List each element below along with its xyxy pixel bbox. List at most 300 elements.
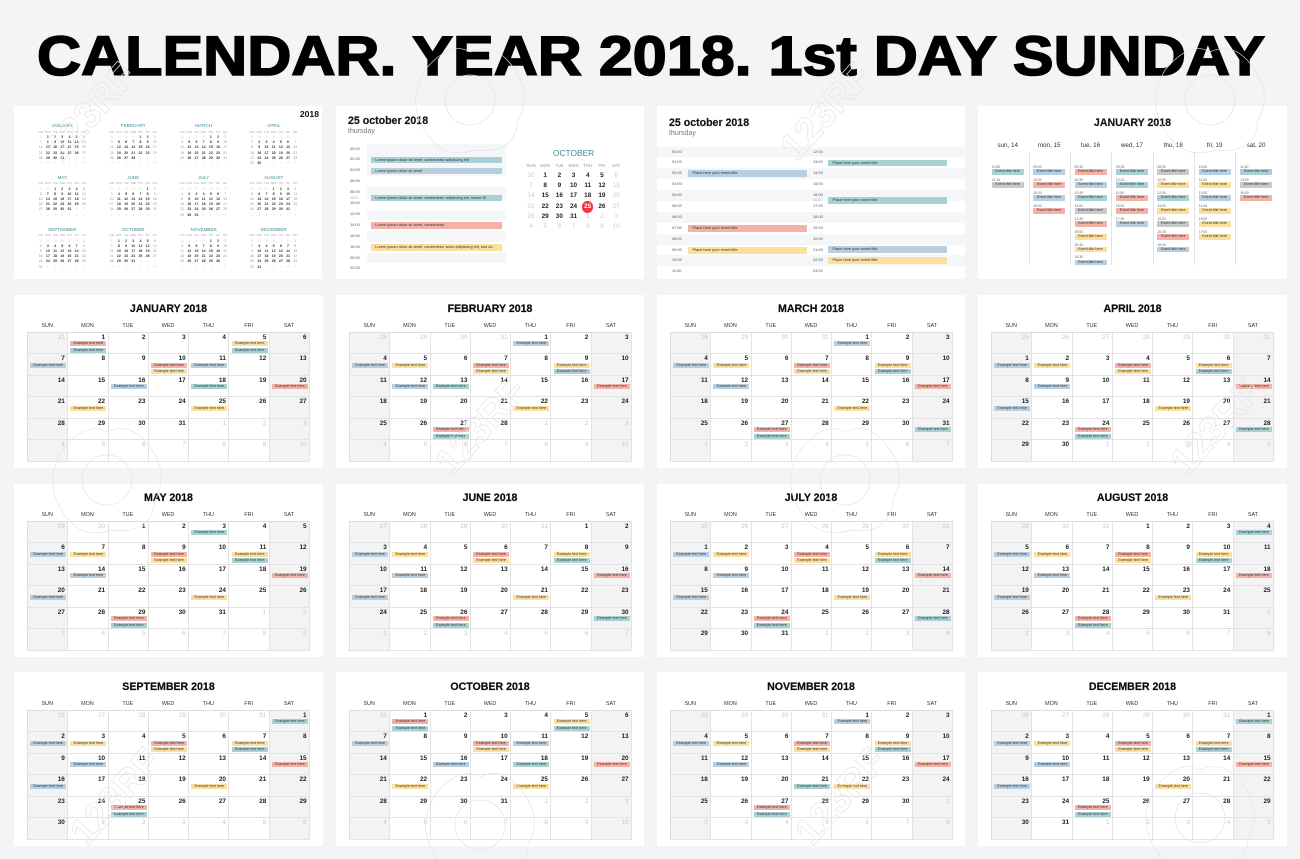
hour rows: 06:00 <box>672 214 682 219</box>
mini month: October: MON <box>116 234 122 237</box>
date grid: 5 <box>1186 355 1190 362</box>
mini month: March: 20 <box>195 151 198 155</box>
date grid: 25 <box>259 587 266 594</box>
mini month: March: 7 <box>224 161 226 165</box>
date grid: 8 <box>222 441 226 448</box>
events: tuesday: 13:00 <box>1074 204 1083 208</box>
date grid: Example text here <box>717 741 746 745</box>
agenda event: blue: Lorem ipsum dolor sit amet <box>375 168 422 173</box>
date grid: 27 <box>1062 609 1069 616</box>
mini month: July: 4 <box>224 213 226 217</box>
mini month: July: 26 <box>209 207 213 211</box>
date grid: 16 <box>460 755 467 762</box>
panel: September 2018 <box>14 672 323 846</box>
date grid <box>349 521 632 651</box>
mini month: April: 29 <box>279 135 283 139</box>
events: wednesday: 10:10 <box>1116 178 1124 182</box>
events: thursday: 13:00 <box>1157 204 1166 208</box>
date grid: 31 <box>380 712 387 719</box>
mini month: April: 31 <box>293 135 297 139</box>
mini month: August: 6 <box>258 192 260 196</box>
mini month: March: 13 <box>195 145 198 149</box>
mini month: August: 3 <box>258 213 260 217</box>
mini month: April: 17 <box>265 151 268 155</box>
date grid: Example text here <box>1118 552 1148 556</box>
agenda hour labels: 14:00 <box>350 222 360 227</box>
date grid: Example text here <box>676 595 706 599</box>
mini month: February: 17 <box>153 145 157 149</box>
events: thursday <box>1157 165 1189 252</box>
mini month: February: 23 <box>146 151 150 155</box>
October date grid with highlighted 25: 19 <box>598 192 605 199</box>
mini month: August: 1 <box>294 207 296 211</box>
date grid: 23 <box>902 398 909 405</box>
date grid: 9 <box>745 566 748 573</box>
mini month: November: 28 <box>180 239 184 243</box>
mini month: October: 4 <box>139 239 141 243</box>
mini month: December: 17 <box>257 254 261 258</box>
date grid: 5 <box>825 819 829 826</box>
October date grid with highlighted 25: 4 <box>529 223 533 230</box>
mini month: April: 3 <box>265 140 267 144</box>
mini month: March: TUE <box>194 131 199 134</box>
date grid: 1 <box>1146 523 1150 530</box>
mini month: March: 14 <box>202 145 206 149</box>
date grid: 7 <box>825 355 829 362</box>
mini month: August <box>249 174 298 217</box>
events: tuesday: Event title here <box>1078 221 1103 225</box>
date grid: Example text here <box>838 406 867 410</box>
date grid: Example text here <box>676 741 706 745</box>
date grid: Example text here <box>676 363 706 367</box>
mini month: March: 26 <box>187 156 191 160</box>
mini month: October: 3 <box>154 259 156 263</box>
October date grid with highlighted 25: 28 <box>527 213 535 220</box>
agenda hour labels: 00:00 <box>350 146 360 151</box>
mini month: January: JANUARY <box>52 123 73 128</box>
mini month: March: 19 <box>187 151 191 155</box>
date grid: 4 <box>222 334 226 341</box>
date grid: 2 <box>865 630 869 637</box>
weekday row <box>1005 701 1258 707</box>
date grid: Example text here <box>436 384 466 388</box>
mini month: February: 5 <box>118 161 120 165</box>
mini month: April <box>249 123 298 165</box>
mini month: June: 5 <box>125 192 127 196</box>
date grid: 14 <box>259 755 266 762</box>
mini month: September: THU <box>67 234 72 237</box>
mini month: February: 1 <box>139 156 141 160</box>
heading: SEPTEMBER 2018 <box>122 680 215 692</box>
events: friday: Event title here <box>1202 195 1227 199</box>
October date grid with highlighted 25: 30 <box>527 172 535 179</box>
date grid: 5 <box>865 544 869 551</box>
date grid: Example text here <box>878 552 908 556</box>
agenda hour labels <box>350 146 360 270</box>
heading: DECEMBER 2018 <box>1089 680 1176 692</box>
date grid <box>991 521 1274 651</box>
mini month: December: 11 <box>265 249 268 253</box>
events: wednesday: 15:00 <box>1116 204 1124 208</box>
mini month: August: 21 <box>265 202 268 206</box>
events: thursday: Event title here <box>1161 221 1186 225</box>
date grid: 31 <box>942 523 950 530</box>
date grid: 25 <box>1263 587 1271 594</box>
date grid: 11 <box>1143 377 1150 384</box>
date grid: 27 <box>621 776 629 783</box>
date grid: Example text here <box>476 369 506 373</box>
date grid: Example text here <box>235 341 265 345</box>
mini month: June: 21 <box>138 202 142 206</box>
weekday row: FRI <box>244 512 253 518</box>
date grid: 30 <box>138 420 145 427</box>
date grid: 10 <box>781 566 788 573</box>
mini month: November: 7 <box>217 265 219 269</box>
mini month: February: 25 <box>110 156 114 160</box>
mini month: April: 27 <box>286 156 290 160</box>
heading: MARCH 2018 <box>778 302 844 314</box>
mini month: May: MON <box>45 182 51 185</box>
schedule event: teal: Place here your event title <box>832 160 877 165</box>
mini month: February: FEBRUARY <box>121 123 146 128</box>
date grid: Example text here <box>154 741 184 745</box>
events: monday: 10:00 <box>1033 178 1042 182</box>
mini month: July: 19 <box>209 202 213 206</box>
date grid: Example text here <box>997 363 1027 367</box>
date grid: 26 <box>741 798 748 805</box>
mini month: December: 27 <box>279 259 283 263</box>
mini month: December: DECEMBER <box>261 226 287 232</box>
weekday row: FRI <box>887 701 896 707</box>
mini month: January: 9 <box>54 140 56 144</box>
date grid: 5 <box>182 733 186 740</box>
mini month: May: 7 <box>68 213 70 217</box>
mini month: October: 10 <box>153 265 157 269</box>
October weekday row <box>526 162 620 168</box>
mini month: October: FRI <box>146 234 150 237</box>
date grid: 18 <box>822 587 829 594</box>
mini month: May: WED <box>59 182 65 185</box>
weekday row: FRI <box>566 701 575 707</box>
mini month: September: 1 <box>47 265 49 269</box>
weekday row: MON <box>81 323 94 329</box>
mini month: June: 2 <box>118 213 120 217</box>
events: sunday: 11:15 <box>992 178 1000 182</box>
date grid: 10 <box>621 355 629 362</box>
date grid: 10 <box>942 733 950 740</box>
mini month: November: 11 <box>180 249 184 253</box>
agenda event: teal long <box>371 195 502 201</box>
October date grid with highlighted 25: 26 <box>598 203 605 210</box>
mini month: September: 27 <box>46 239 50 243</box>
mini month: August: 7 <box>265 192 267 196</box>
date grid: 5 <box>303 523 307 530</box>
mini month: July: 30 <box>216 187 220 191</box>
date grid: 4 <box>1227 819 1230 826</box>
mini month: September: 4 <box>68 265 70 269</box>
mini month: August: 30 <box>279 207 283 211</box>
date grid: 12 <box>741 755 748 762</box>
mini month: February: TUE <box>124 131 129 134</box>
date grid: 27 <box>299 398 307 405</box>
date grid: Example text here <box>1038 762 1067 766</box>
mini month: July: 18 <box>202 202 206 206</box>
date grid: 5 <box>464 544 467 551</box>
mini month: March: 2 <box>217 135 219 139</box>
mini month: February: 6 <box>125 140 127 144</box>
date grid: 17 <box>942 755 950 762</box>
mini month: July: 2 <box>188 192 190 196</box>
date grid: 8 <box>1267 630 1271 637</box>
mini month: March: SUN <box>179 131 185 134</box>
date grid: 27 <box>781 523 788 530</box>
date grid: 5 <box>1267 441 1271 448</box>
events: thursday: Event title here <box>1161 195 1186 199</box>
mini month: February: 27 <box>124 156 128 160</box>
date grid: 11 <box>1103 755 1109 762</box>
mini month: October: 13 <box>153 244 157 248</box>
events: thursday: 12:00 <box>1157 191 1166 195</box>
mini month: November: 30 <box>195 239 198 243</box>
date grid: Example text here <box>1038 363 1067 367</box>
mini month: February: 24 <box>153 151 157 155</box>
date grid: 11 <box>380 377 387 384</box>
date grid: 24 <box>781 609 788 616</box>
mini month: February: 6 <box>125 161 127 165</box>
mini month: February: 14 <box>131 145 135 149</box>
date grid: 2 <box>182 523 186 530</box>
weekday row: FRI <box>887 512 896 518</box>
mini month: November: 28 <box>202 259 206 263</box>
date grid: Example text here <box>797 747 827 751</box>
mini month: August: 3 <box>287 187 289 191</box>
mini month: July: 17 <box>195 202 198 206</box>
mini month: March: FRI <box>216 131 220 134</box>
date grid: 16 <box>581 377 588 384</box>
mini month: October: 9 <box>125 244 127 248</box>
mini month: February: 29 <box>117 135 121 139</box>
date grid: 7 <box>504 819 508 826</box>
weekday row: WED <box>162 323 174 329</box>
mini month: September: 22 <box>82 254 86 258</box>
date grid: 11 <box>822 566 829 573</box>
date grid: 13 <box>460 377 467 384</box>
mini month: June: 10 <box>110 197 114 201</box>
October date grid with highlighted 25: 31 <box>570 213 577 220</box>
mini month: May: TUE <box>53 182 58 185</box>
date grid: 27 <box>902 609 909 616</box>
events: sunday <box>992 165 1024 188</box>
date grid: 6 <box>182 630 186 637</box>
date grid: 5 <box>142 630 145 637</box>
weekday row: THU <box>1167 701 1178 707</box>
mini month: January: 3 <box>83 156 85 160</box>
weekday row: SAT <box>284 701 294 707</box>
date grid: 26 <box>420 420 427 427</box>
mini month: February: 10 <box>153 140 157 144</box>
weekday row: THU <box>203 323 214 329</box>
mini month: September: 18 <box>53 254 57 258</box>
date grid: 28 <box>380 798 387 805</box>
date grid: Example text here <box>1078 616 1108 620</box>
date grid: Example text here <box>597 573 627 577</box>
mini month: May: FRI <box>75 182 79 185</box>
mini month: November: 5 <box>203 265 205 269</box>
mini month: July: 28 <box>202 187 206 191</box>
mini month: August: 26 <box>250 207 254 211</box>
weekday row: TUE <box>122 323 133 329</box>
mini month: September: MON <box>45 234 51 237</box>
mini month: June: 5 <box>139 213 141 217</box>
October date grid with highlighted 25: 3 <box>614 213 618 220</box>
date grid: 13 <box>1183 755 1190 762</box>
events: saturday: 15:00 <box>1240 191 1249 195</box>
mini month: December <box>249 226 298 269</box>
date grid: Example text here <box>516 406 546 410</box>
date grid: 28 <box>942 609 950 616</box>
mini month: November: 1 <box>210 239 212 243</box>
mini month: September: 2 <box>54 265 56 269</box>
date grid: 30 <box>902 798 909 805</box>
date grid: 31 <box>1223 609 1230 616</box>
mini month: November: SAT <box>223 234 228 237</box>
date grid: Example text here <box>797 558 827 562</box>
date grid: 31 <box>1062 819 1069 826</box>
mini month: February: 21 <box>131 151 135 155</box>
October date grid with highlighted 25: 21 <box>527 203 535 210</box>
date grid: 8 <box>946 819 950 826</box>
date grid: 12 <box>179 755 186 762</box>
date grid: 31 <box>822 334 829 341</box>
date grid: Example text here <box>355 552 385 556</box>
date grid: Example text here <box>597 384 627 388</box>
mini month: April: SUN <box>249 131 255 134</box>
mini month: June: 30 <box>131 187 135 191</box>
mini month: March: 9 <box>217 140 219 144</box>
mini month: November: 7 <box>203 244 205 248</box>
mini month: May: 2 <box>61 187 63 191</box>
mini month: June: 12 <box>124 197 128 201</box>
date grid: 29 <box>1022 441 1029 448</box>
date grid: Example text here <box>1199 369 1229 373</box>
watermark overlay: 123RF <box>772 56 880 168</box>
mini month: October: 30 <box>124 259 128 263</box>
mini month: June: 6 <box>132 192 134 196</box>
weekday row <box>684 323 937 329</box>
date grid: 27 <box>98 712 105 719</box>
mini month: August: 1 <box>273 187 275 191</box>
date grid: 27 <box>1102 334 1109 341</box>
date grid: Example text here <box>1158 406 1188 410</box>
mini month: May: 8 <box>54 192 56 196</box>
agenda event: yellow: Lorem ipsum dolor sit amet, consectetur sceic adipiscing elit, sed do <box>375 244 493 249</box>
mini month: April: 4 <box>287 161 289 165</box>
date grid: Example text here <box>997 406 1027 410</box>
events: wednesday: Event title here <box>1120 208 1144 212</box>
mini month: June: 27 <box>131 207 135 211</box>
mini month: February: SUN <box>109 131 114 134</box>
mini month: April: 10 <box>265 145 268 149</box>
date grid: 1 <box>1106 819 1109 826</box>
date grid: 4 <box>544 712 548 719</box>
mini month: May: SUN <box>38 182 43 185</box>
date grid: 4 <box>704 355 708 362</box>
hour rows: 14:00 <box>813 170 823 175</box>
mini month: January: 23 <box>53 151 57 155</box>
weekday subheading: thursday <box>348 128 375 135</box>
events: wednesday: 09:25 <box>1116 165 1124 169</box>
date grid: 18 <box>701 398 708 405</box>
weekday row: MON <box>81 701 94 707</box>
mini month: April: 28 <box>272 135 276 139</box>
mini month: June: SAT <box>152 182 157 185</box>
date grid: 24 <box>380 609 387 616</box>
mini month: October: 30 <box>110 239 114 243</box>
agenda hour labels: 12:00 <box>350 211 360 216</box>
date grid: 23 <box>1062 420 1069 427</box>
date grid: 17 <box>1102 398 1109 405</box>
mini month: March: 2 <box>188 161 190 165</box>
date grid: Example text here <box>114 805 144 809</box>
October month heading: OCTOBER <box>553 148 594 158</box>
mini month: July: 2 <box>210 213 212 217</box>
date grid: Example text here <box>1038 384 1067 388</box>
mini month: May: 3 <box>40 213 42 217</box>
weekday row: MON <box>81 512 94 518</box>
mini month: November: 5 <box>188 244 190 248</box>
mini month: June: 9 <box>154 192 156 196</box>
hour rows: 22:00 <box>813 257 823 262</box>
mini month: August: 22 <box>272 202 276 206</box>
date grid: Example text here <box>878 363 908 367</box>
date grid: Example text here <box>997 741 1027 745</box>
date grid: 30 <box>1062 523 1069 530</box>
mini month: May: 9 <box>61 192 63 196</box>
date grid: 6 <box>906 441 909 448</box>
date grid: 21 <box>98 587 105 594</box>
mini month: December: 30 <box>279 239 283 243</box>
date grid: 13 <box>58 566 65 573</box>
date grid: 15 <box>701 587 708 594</box>
mini month: December: 1 <box>294 239 296 243</box>
date grid: 26 <box>1143 798 1150 805</box>
date grid: Example text here <box>838 784 867 788</box>
date grid: 7 <box>263 733 266 740</box>
mini month: September: 13 <box>67 249 71 253</box>
mini month: June: 14 <box>138 197 142 201</box>
October date grid with highlighted 25: 3 <box>572 172 575 179</box>
mini month: June: 22 <box>146 202 150 206</box>
date grid: 1 <box>1106 441 1109 448</box>
panel: December 2018 <box>978 672 1287 846</box>
date grid: 18 <box>701 776 708 783</box>
mini month: May: 27 <box>39 207 43 211</box>
mini month: July: 4 <box>203 192 205 196</box>
mini month: August: 6 <box>280 213 282 217</box>
mini month: October: 31 <box>131 259 135 263</box>
hour rows: 09:00 <box>672 247 682 252</box>
date grid: 3 <box>464 630 467 637</box>
mini month: October: 24 <box>131 254 135 258</box>
events: friday: 16:00 <box>1199 217 1207 221</box>
mini month: November: 17 <box>223 249 227 253</box>
date grid: Example text here <box>476 363 506 367</box>
date grid: 13 <box>1223 377 1230 384</box>
mini month: May: 7 <box>47 192 49 196</box>
mini month: December: 31 <box>257 265 261 269</box>
heading: OCTOBER 2018 <box>450 680 530 692</box>
mini month: January: 10 <box>82 161 86 165</box>
